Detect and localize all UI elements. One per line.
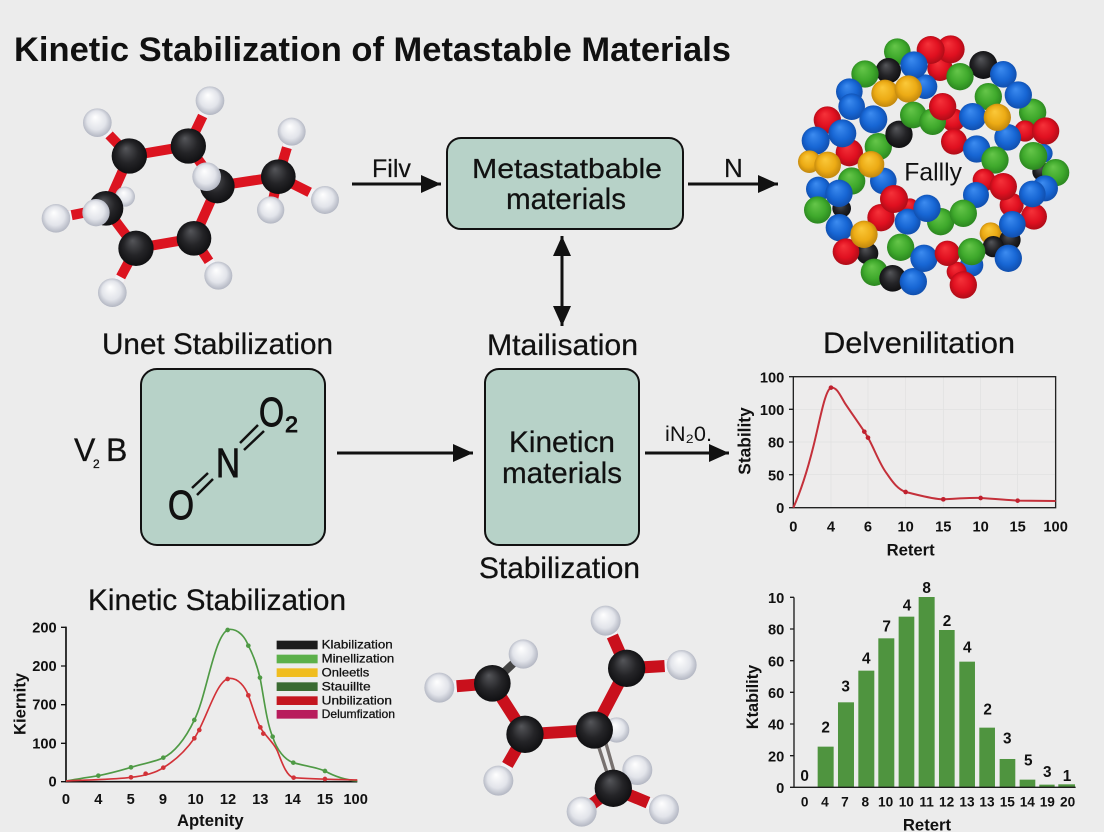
bar value labels: 2	[821, 719, 830, 736]
y axis labels: 0	[49, 775, 57, 791]
x axis labels: 15	[317, 792, 333, 808]
bar value labels	[800, 580, 1072, 785]
label: iN2O: iN₂0.	[665, 423, 712, 446]
x axis labels: 100	[1043, 519, 1068, 535]
heading: Stabilization: Stabilization	[479, 552, 640, 585]
x axis labels: 9	[159, 792, 167, 808]
bar value labels: 7	[882, 619, 891, 636]
x axis labels: 6	[864, 519, 872, 535]
panel text line 2: materials	[506, 183, 626, 216]
x axis labels: 10	[897, 519, 914, 535]
y axis labels: 80	[768, 623, 784, 639]
x axis labels: 13	[959, 795, 975, 810]
legend: Onleetls	[322, 666, 369, 679]
legend	[277, 639, 395, 721]
arrow: molecule to metastable box	[352, 182, 441, 186]
legend: Klabilization	[322, 639, 393, 652]
x axis labels: 100	[343, 792, 368, 808]
bar value labels: 4	[903, 597, 912, 614]
x axis labels: 7	[841, 795, 849, 810]
x axis labels: 12	[939, 795, 955, 810]
x axis labels: 13	[252, 792, 268, 808]
y axis labels: 100	[760, 403, 784, 419]
formula atoms: N	[216, 440, 240, 486]
y axis title: Stability	[735, 407, 755, 475]
x axis labels: 8	[862, 795, 870, 810]
heading: Mtailisation: Mtailisation	[487, 329, 638, 362]
label: Filv: Filv	[372, 155, 411, 183]
y axis labels	[768, 591, 784, 797]
y axis title: Ktability	[744, 665, 762, 729]
cluster label: Fallly	[904, 159, 963, 186]
x axis labels: 15	[1000, 795, 1015, 810]
y axis labels	[760, 370, 784, 517]
panel: nitrogen dioxide structure	[141, 369, 325, 545]
heading: Delvenilitation: Delvenilitation	[823, 327, 1015, 360]
icon: branched molecule bottom centre	[424, 606, 697, 827]
arrow: structure to kinetic materials	[337, 452, 473, 454]
x axis labels: 12	[220, 792, 236, 808]
x axis labels: 15	[935, 519, 951, 535]
bar value labels: 0	[800, 768, 809, 785]
x axis labels: 13	[979, 795, 995, 810]
label: V2 B: V	[74, 432, 96, 468]
y axis labels: 0	[776, 781, 784, 797]
heading: Unet Stabilization: Unet Stabilization	[102, 328, 333, 361]
red series	[66, 677, 357, 781]
label: V2 B: B	[106, 432, 127, 468]
y axis labels: 50	[768, 468, 784, 484]
double bonds	[192, 425, 264, 495]
x axis labels: 19	[1040, 795, 1055, 810]
x axis labels: 14	[1020, 795, 1035, 810]
bar value labels: 3	[841, 678, 850, 695]
legend: Minellization	[322, 653, 394, 666]
x axis labels: 5	[127, 792, 135, 808]
arrow: box to cluster	[688, 182, 778, 186]
x axis labels: 4	[827, 519, 836, 535]
bar value labels: 1	[1063, 768, 1072, 785]
chart: kinetic line chart	[10, 620, 395, 830]
x axis labels	[789, 519, 1068, 535]
panel text line 2: materials	[502, 457, 622, 490]
bar value labels: 3	[1043, 764, 1052, 781]
legend: Delumfization	[322, 708, 395, 721]
arrow: kinetic materials to chart	[645, 452, 729, 454]
y axis labels	[32, 620, 57, 791]
panel: kinetic materials	[485, 369, 639, 545]
x axis labels: 10	[899, 795, 914, 810]
x axis labels: 0	[62, 792, 70, 808]
icon: coloured sphere cluster	[798, 35, 1069, 299]
x axis title: Retert	[887, 540, 935, 559]
panel text line 1: Kineticn	[509, 426, 615, 459]
x axis labels: 20	[1060, 795, 1076, 810]
y axis title: Kiernity	[10, 672, 29, 735]
y axis labels: 60	[768, 654, 784, 670]
bar value labels: 2	[943, 613, 951, 630]
formula atoms: 2	[285, 412, 298, 437]
arrow: double headed vertical	[560, 236, 564, 326]
y axis labels: 200	[32, 620, 57, 636]
x axis labels: 15	[1009, 519, 1026, 535]
formula atoms: O	[168, 482, 194, 528]
green series	[66, 628, 357, 781]
panel text line 1: Metastatbable	[472, 153, 662, 184]
formula atoms	[168, 389, 298, 528]
y axis labels: 40	[768, 718, 784, 734]
panel: metastable materials	[447, 138, 683, 229]
y axis labels: 60	[768, 686, 784, 702]
bar value labels: 5	[1024, 753, 1033, 770]
icon: ring molecule top left	[42, 86, 339, 307]
label: V2 B	[74, 432, 127, 471]
bar value labels: 4	[862, 651, 871, 668]
bars	[818, 597, 1075, 787]
formula atoms: O	[259, 389, 284, 435]
label: V2 B: 2	[93, 457, 100, 471]
title: Kinetic Stabilization of Metastable Materials	[14, 31, 731, 69]
y axis labels: 10	[768, 591, 784, 607]
label: N: N	[724, 153, 743, 183]
y axis labels: 100	[32, 736, 57, 752]
y axis labels: 80	[768, 436, 784, 452]
legend: Unbilization	[322, 694, 392, 707]
y axis labels: 0	[776, 501, 784, 517]
x axis labels	[62, 792, 368, 808]
bar value labels: 4	[963, 639, 972, 656]
x axis labels: 10	[187, 792, 204, 808]
y axis labels: 20	[768, 749, 784, 765]
x axis title: Aptenity	[177, 811, 244, 830]
x axis labels: 10	[878, 795, 894, 810]
y axis labels: 100	[760, 370, 784, 386]
x axis labels	[801, 795, 1076, 810]
bar value labels: 3	[1003, 731, 1012, 748]
x axis labels: 4	[94, 792, 103, 808]
bar value labels: 8	[922, 580, 931, 597]
y axis labels: 200	[32, 659, 57, 675]
heading: Kinetic Stabilization: Kinetic Stabilization	[88, 584, 346, 617]
x axis labels: 14	[284, 792, 302, 808]
x axis labels: 0	[801, 795, 809, 810]
x axis labels: 4	[821, 795, 829, 810]
data line	[793, 388, 1056, 508]
legend: Stauillte	[322, 680, 371, 693]
x axis labels: 10	[972, 519, 989, 535]
y axis labels: 700	[32, 698, 57, 714]
chart: stability line chart	[735, 370, 1068, 559]
x axis labels: 11	[919, 795, 934, 810]
chart: bar chart	[744, 580, 1076, 832]
x axis labels: 0	[789, 519, 797, 535]
bar value labels: 2	[983, 701, 992, 718]
